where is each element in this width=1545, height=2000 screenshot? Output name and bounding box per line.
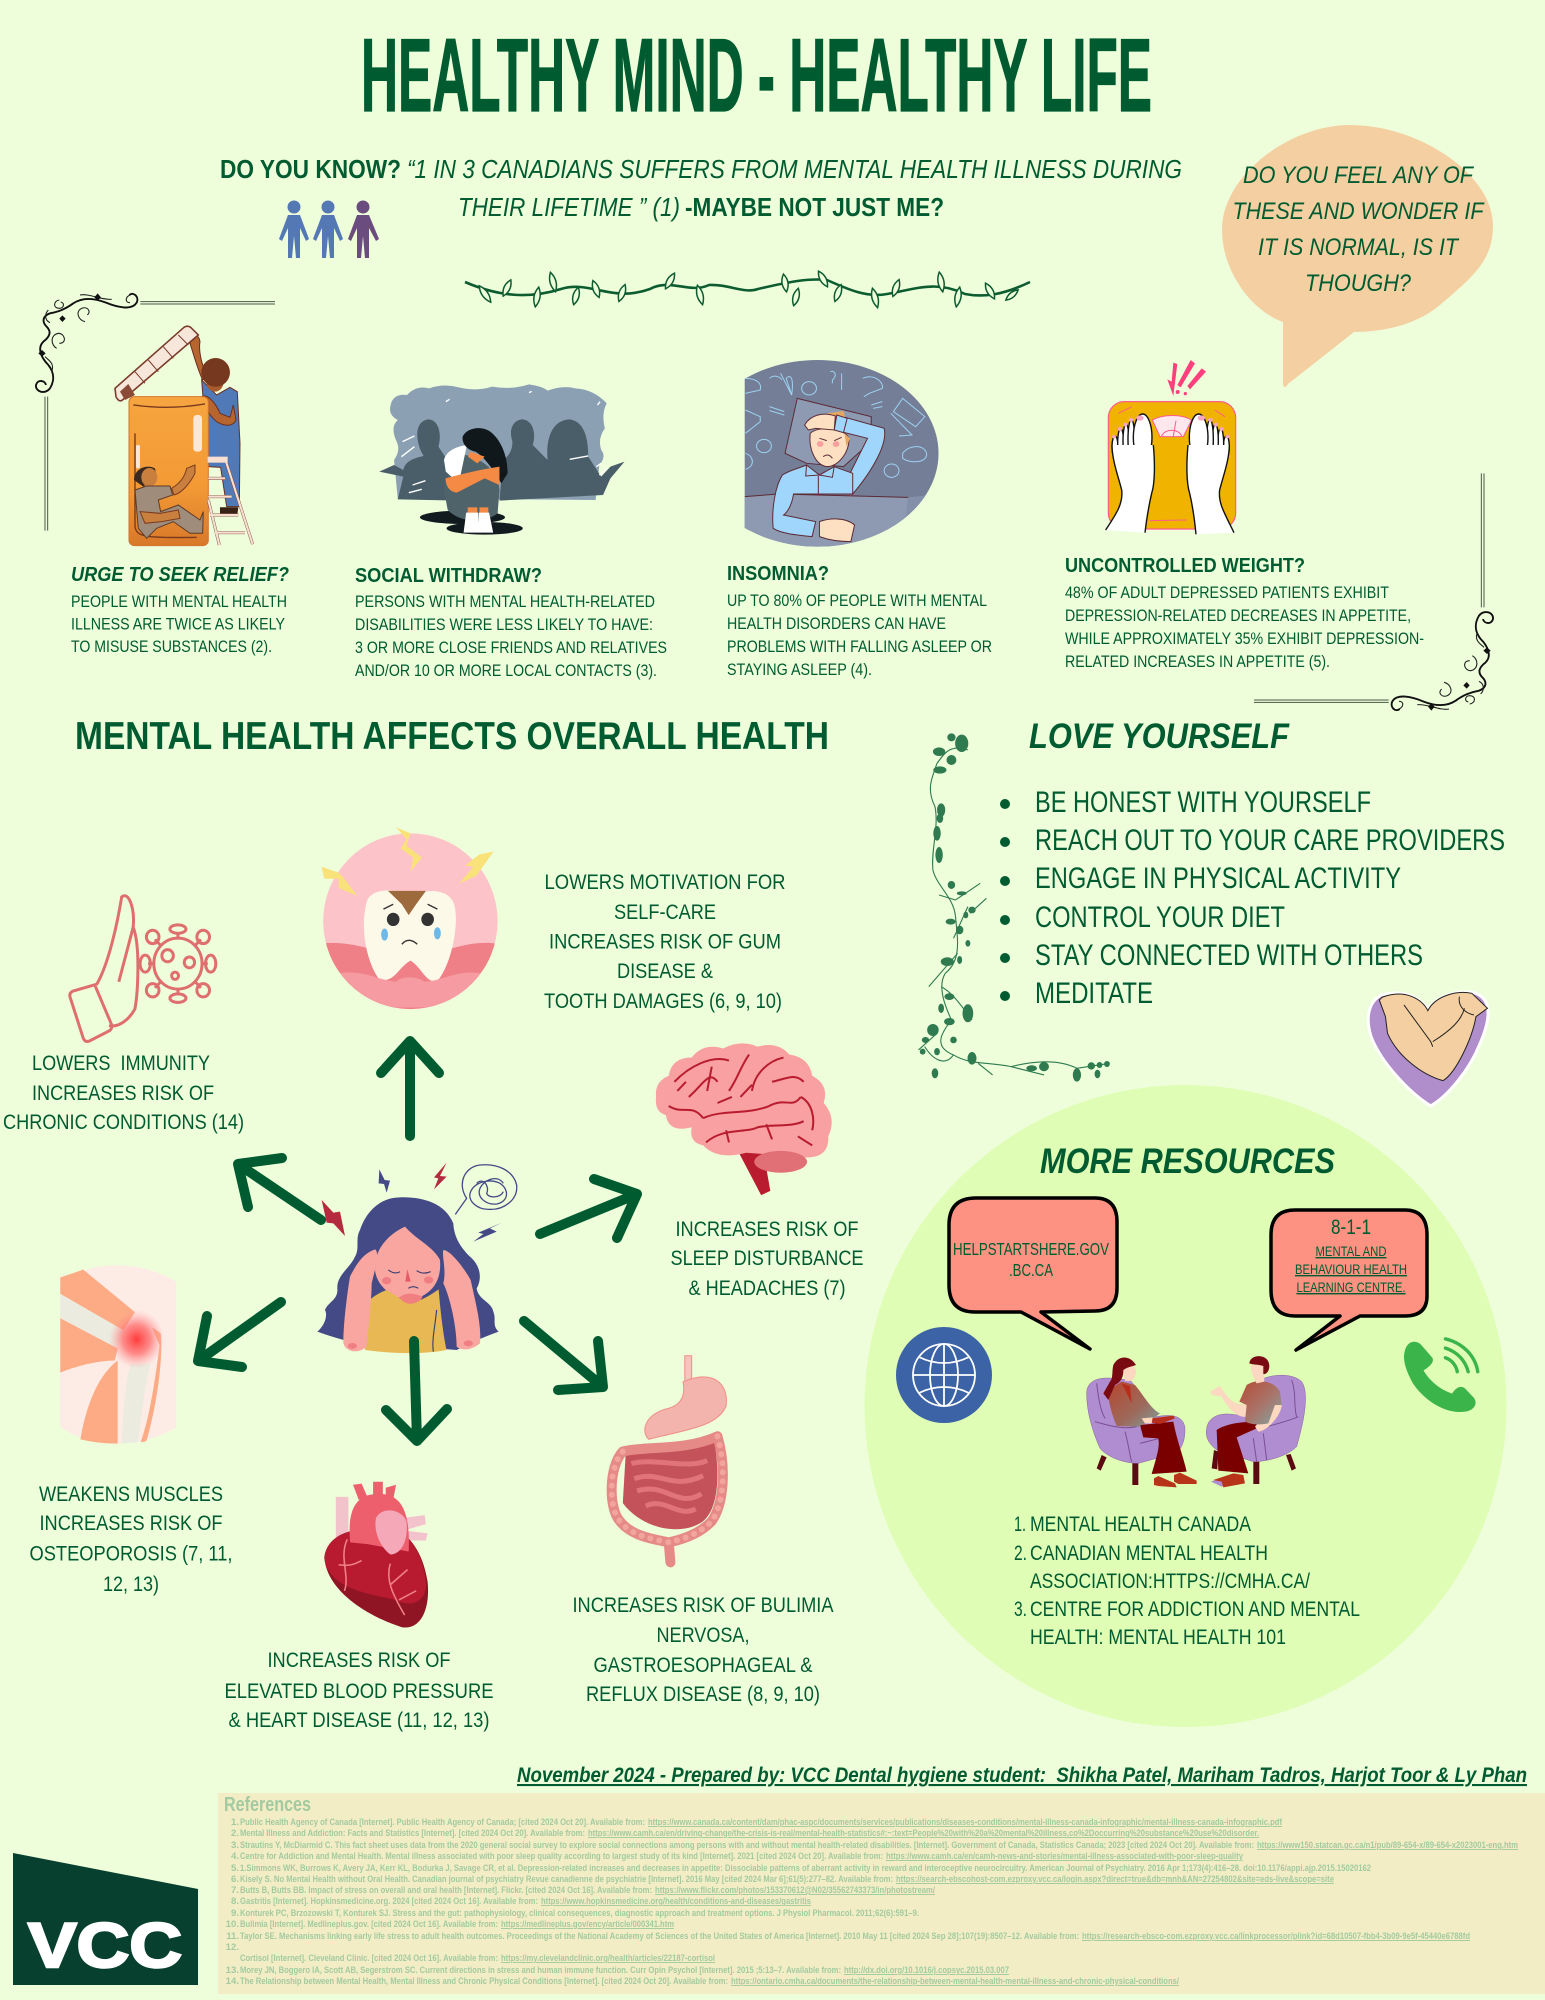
panel: references: 3.	[231, 1840, 239, 1851]
bottle cap	[115, 326, 198, 401]
numbered resource list: 1.	[1014, 1513, 1026, 1536]
text: knee: INCREASES RISK OF	[40, 1512, 222, 1535]
panel: insomnia: STAYING ASLEEP (4).	[727, 661, 872, 679]
numbered resource list: HEALTH: MENTAL HEALTH 101	[1030, 1626, 1286, 1649]
illustration: knee pain	[60, 1265, 176, 1444]
numbered resource list: MENTAL HEALTH CANADA	[1030, 1513, 1251, 1536]
panel: references: Konturek PC, Brzozowski T, Konturek SJ. Stress and the gut: pathophysiology, clinical consequences, diagnostic approach and treatment options. J Physiol Pharmacol. 2011;62(6):591–9.	[240, 1908, 919, 1919]
panel: references: https://my.clevelandclinic.org/health/articles/22187-cortisol	[501, 1953, 715, 1964]
illustration: brain	[656, 1043, 832, 1195]
speech bubble: helpstartshere: HELPSTARTSHERE.GOV	[953, 1239, 1109, 1259]
panel: references: Public Health Agency of Canada [Internet]. Public Health Agency of Canada; [cited 2024 Oct 20]. Available from:	[240, 1817, 645, 1828]
panel: references: https://ontario.cmha.ca/documents/the-relationship-between-mental-health-mental-illness-and-chronic-physical-conditions/	[731, 1976, 1179, 1987]
icon: hand stopping virus	[70, 896, 216, 1041]
speech bubble: helpstartshere: .BC.CA	[1009, 1260, 1053, 1280]
speech bubble: 8-1-1: LEARNING CENTRE.	[1296, 1279, 1406, 1295]
panel: references: 13.	[226, 1965, 239, 1976]
person in bottle	[134, 465, 203, 538]
panel: social withdraw: SOCIAL WITHDRAW?	[355, 564, 542, 587]
panel: insomnia: UP TO 80% OF PEOPLE WITH MENTAL	[727, 592, 987, 610]
text: digestive: REFLUX DISEASE (8, 9, 10)	[586, 1683, 820, 1706]
numbered resource list: 3.	[1014, 1598, 1027, 1621]
illustration: person trapped in pill bottle	[115, 326, 253, 546]
did-you-know statement: THEIR LIFETIME ” (1)	[458, 192, 680, 222]
panel: insomnia: INSOMNIA?	[727, 562, 829, 585]
panel: references: https://www.camh.ca/en/camh-news-and-stories/mental-illness-associated-with-poor-sleep-quality	[886, 1851, 1244, 1862]
numbered resource list: 2.	[1014, 1542, 1027, 1565]
panel: references: Cortisol [Internet]. Cleveland Clinic. [cited 2024 Oct 16]. Available from:	[240, 1953, 498, 1964]
panel: references: Morey JN, Boggero IA, Scott AB, Segerstrom SC. Current directions in stress and human immune function. Curr Opin Psychol [Internet]. 2015 ;5:13–7. Available from:	[240, 1965, 841, 1976]
arrow lower left	[198, 1302, 281, 1367]
panel: urge to seek relief	[71, 563, 289, 656]
text: immunity	[3, 1052, 244, 1134]
speech bubble: do you feel: DO YOU FEEL ANY OF	[1243, 162, 1475, 189]
arrow lower right	[524, 1321, 603, 1390]
icon: self-hug heart	[1368, 992, 1488, 1106]
did-you-know statement	[220, 154, 1182, 222]
panel: uncontrolled weight: UNCONTROLLED WEIGHT?	[1065, 554, 1305, 577]
speech bubble: helpstartshere	[949, 1198, 1117, 1349]
arrow upper right	[540, 1179, 637, 1238]
woman in armchair	[1087, 1357, 1197, 1487]
panel: uncontrolled weight	[1065, 554, 1424, 671]
panel: references: References	[224, 1794, 311, 1816]
text: digestive: NERVOSA,	[656, 1624, 750, 1647]
panel: references: 12.	[226, 1942, 239, 1953]
panel: references: https://www.camh.ca/en/driving-change/the-crisis-is-real/mental-health-statistics#:~:text=People%20with%20a%20mental%20illness,co%2Doccurring%20substance%20use%20disorder.	[588, 1828, 1259, 1839]
man in armchair	[1206, 1356, 1306, 1487]
speech bubble: do you feel: THOUGH?	[1305, 270, 1411, 297]
text: digestive	[572, 1594, 834, 1706]
panel: references: https://www.flickr.com/photos/153370612@N02/35562743373/in/photostream/	[655, 1885, 935, 1896]
text: heart: INCREASES RISK OF	[268, 1649, 450, 1672]
panel: references: Mental Illness and Addiction: Facts and Statistics [Internet]. [cited 2024 Oct 20]. Available from:	[240, 1828, 585, 1839]
text: tooth: INCREASES RISK OF GUM	[549, 930, 781, 954]
panel: references: Strautins Y, McDiarmid C. This fact sheet uses data from the 2020 general social survey to explore social connections among persons with and without mental health-related disabilities. [Internet]. Government of Canada, Statistics Canada; 2023 [cited 2024 Oct 20]. Available from:	[240, 1840, 1254, 1851]
text: tooth	[544, 871, 786, 1013]
bullet list: love yourself: STAY CONNECTED WITH OTHERS	[1035, 939, 1423, 972]
text: knee: 12, 13)	[103, 1573, 159, 1596]
arrows from centre to body systems	[198, 1041, 637, 1441]
panel: urge to seek relief: TO MISUSE SUBSTANCES (2).	[71, 638, 272, 656]
arrow down	[386, 1341, 447, 1441]
panel: references: 11.	[226, 1931, 239, 1942]
VCC logo: VCC	[28, 1911, 182, 1981]
panel: urge to seek relief: URGE TO SEEK RELIEF?	[71, 563, 289, 586]
panel: references: https://search-ebscohost-com.ezproxy.vcc.ca/login.aspx?direct=true&db=mnh&AN=27254802&site=eds-live&scope=site	[896, 1874, 1334, 1885]
panel: references: The Relationship between Mental Health, Mental Illness and Chronic Physical Conditions [Internet]. [cited 2024 Oct 20]. Available from:	[240, 1976, 728, 1987]
text: tooth: SELF-CARE	[614, 901, 716, 924]
text: brain: SLEEP DISTURBANCE	[670, 1247, 864, 1270]
standing person	[190, 335, 240, 515]
panel: more resources circle	[864, 1085, 1506, 1727]
illustration: girl with headache	[317, 1163, 517, 1353]
panel: references: Bulimia [Internet]. Medlineplus.gov. [cited 2024 Oct 16]. Available from:	[240, 1919, 498, 1930]
text: tooth: DISEASE &	[617, 960, 713, 983]
speech bubble: do you feel: THESE AND WONDER IF	[1232, 198, 1485, 225]
text: immunity: CHRONIC CONDITIONS (14)	[3, 1111, 244, 1134]
corner ornament top left	[36, 293, 275, 531]
text: brain: & HEADACHES (7)	[688, 1277, 846, 1300]
did-you-know statement: DO YOU KNOW?	[220, 154, 401, 184]
panel: social withdraw: AND/OR 10 OR MORE LOCAL CONTACTS (3).	[355, 662, 657, 680]
heading: love yourself: LOVE YOURSELF	[1029, 717, 1290, 756]
heading: more resources: MORE RESOURCES	[1040, 1142, 1335, 1181]
bullet list: love yourself: BE HONEST WITH YOURSELF	[1035, 786, 1371, 819]
illustration: man with insomnia	[744, 360, 938, 547]
bullet list: love yourself	[1000, 786, 1505, 1010]
text: heart: ELEVATED BLOOD PRESSURE	[224, 1680, 494, 1703]
panel: social withdraw	[355, 564, 667, 680]
panel: references: 2.	[231, 1828, 239, 1839]
panel: urge to seek relief: ILLNESS ARE TWICE AS LIKELY	[71, 616, 285, 634]
panel: references: 1.	[231, 1817, 239, 1828]
text: brain: INCREASES RISK OF	[676, 1218, 858, 1241]
climbing vine	[919, 733, 1110, 1082]
numbered resource list: CENTRE FOR ADDICTION AND MENTAL	[1030, 1598, 1360, 1621]
panel: references: 8.	[231, 1896, 239, 1907]
panel: references: https://www.canada.ca/content/dam/phac-aspc/documents/services/publications/diseases-conditions/mental-illness-canada-infographic/mental-illness-canada-infographic.pdf	[648, 1817, 1283, 1828]
illustration: social withdrawal	[379, 384, 624, 535]
panel: references: Taylor SE. Mechanisms linking early life stress to adult health outcomes. Proceedings of the National Academy of Sciences of the United States of America [Internet]. 2010 May 11 [cited 2024 Sep 28];107(19):8507–12. Available from:	[240, 1931, 1079, 1942]
panel: references: https://medlineplus.gov/ency/article/000341.htm	[501, 1919, 674, 1930]
illustration: digestive tract	[612, 1356, 726, 1562]
text: knee: OSTEOPOROSIS (7, 11,	[30, 1542, 232, 1566]
panel: references: 4.	[231, 1851, 239, 1862]
right foot	[1187, 414, 1234, 534]
VCC logo	[13, 1853, 198, 1985]
panel: references: Kisely S. No Mental Health without Oral Health. Canadian journal of psychiatry Revue canadienne de psychiatrie [Internet]. 2016 May [cited 2024 Mar 6];61(5):277–82. Available from:	[240, 1874, 893, 1885]
panel: references: 10.	[226, 1919, 239, 1930]
icon: globe	[896, 1327, 992, 1423]
did-you-know statement: “1 IN 3 CANADIANS SUFFERS FROM MENTAL HEALTH ILLNESS DURING	[407, 154, 1182, 184]
panel: social withdraw: PERSONS WITH MENTAL HEALTH-RELATED	[355, 593, 655, 611]
illustration: counselling session	[1087, 1356, 1306, 1487]
bottle	[129, 397, 208, 546]
panel: insomnia: PROBLEMS WITH FALLING ASLEEP OR	[727, 638, 992, 656]
panel: references: Butts B, Butts BB. Impact of stress on overall and oral health [Internet]. Flickr. [cited 2024 Oct 16]. Available from:	[240, 1885, 652, 1896]
text: brain	[670, 1218, 864, 1300]
panel: uncontrolled weight: WHILE APPROXIMATELY 35% EXHIBIT DEPRESSION-	[1065, 630, 1424, 648]
panel: references: Centre for Addiction and Mental Health. Mental illness associated with poor sleep quality according to largest study of its kind [Internet]. 2021 [cited 2024 Oct 20]. Available from:	[240, 1851, 883, 1862]
panel: references: http://dx.doi.org/10.1016/j.copsyc.2015.03.007	[844, 1965, 1009, 1976]
illustration: heart	[324, 1482, 428, 1628]
panel: references: 14.	[226, 1976, 239, 1987]
illustration: tooth with pain	[322, 827, 498, 1010]
panel: references: Gastritis [Internet]. Hopkinsmedicine.org. 2024 [cited 2024 Oct 16]. Available from:	[240, 1896, 538, 1907]
text: tooth: LOWERS MOTIVATION FOR	[544, 871, 786, 894]
text: tooth: TOOTH DAMAGES (6, 9, 10)	[544, 990, 782, 1013]
text: digestive: GASTROESOPHAGEAL &	[594, 1654, 812, 1677]
panel: references: 7.	[231, 1885, 239, 1896]
panel: social withdraw: DISABILITIES WERE LESS LIKELY TO HAVE:	[355, 616, 653, 634]
icon: three people	[279, 200, 379, 258]
numbered resource list: CANADIAN MENTAL HEALTH	[1030, 1542, 1268, 1565]
vine divider	[465, 270, 1030, 308]
panel: references: 9.	[231, 1908, 239, 1919]
numbered resource list: ASSOCIATION:HTTPS://CMHA.CA/	[1030, 1570, 1310, 1593]
panel: references: 5.	[231, 1863, 239, 1874]
left foot	[1106, 414, 1154, 533]
numbered resource list	[1014, 1513, 1360, 1649]
text: digestive: INCREASES RISK OF BULIMIA	[572, 1594, 834, 1617]
panel: references: 6.	[231, 1874, 239, 1885]
speech bubble: 8-1-1	[1271, 1210, 1427, 1350]
heading: mental health affects overall health: MENTAL HEALTH AFFECTS OVERALL HEALTH	[75, 715, 829, 758]
panel: uncontrolled weight: 48% OF ADULT DEPRESSED PATIENTS EXHIBIT	[1065, 584, 1389, 602]
text: knee	[30, 1483, 232, 1596]
speech bubble: 8-1-1: MENTAL AND	[1316, 1243, 1386, 1259]
did-you-know statement: -MAYBE NOT JUST ME?	[685, 192, 944, 222]
corner ornament bottom right	[1254, 473, 1493, 711]
text: heart: & HEART DISEASE (11, 12, 13)	[228, 1709, 490, 1732]
bullet list: love yourself: CONTROL YOUR DIET	[1035, 901, 1285, 934]
panel: references: https://www.hopkinsmedicine.org/health/conditions-and-diseases/gastritis	[541, 1896, 811, 1907]
text: knee: WEAKENS MUSCLES	[39, 1483, 223, 1506]
arrow upper left	[238, 1158, 321, 1220]
panel: references	[218, 1793, 1545, 1994]
text: heart	[224, 1649, 494, 1732]
speech bubble: do you feel	[1222, 125, 1493, 387]
speech bubble: do you feel: IT IS NORMAL, IS IT	[1258, 234, 1460, 261]
crouching figure	[420, 428, 523, 535]
panel: uncontrolled weight: RELATED INCREASES IN APPETITE (5).	[1065, 653, 1330, 671]
arrow up	[381, 1041, 439, 1136]
text: immunity: LOWERS IMMUNITY	[32, 1052, 210, 1075]
bullet list: love yourself: ENGAGE IN PHYSICAL ACTIVITY	[1035, 862, 1401, 895]
panel: insomnia	[727, 562, 992, 679]
speech bubble: 8-1-1: 8-1-1	[1331, 1216, 1371, 1239]
speech bubble: 8-1-1: BEHAVIOUR HEALTH	[1295, 1261, 1407, 1277]
icon: phone	[1404, 1339, 1478, 1412]
ladder	[208, 458, 253, 545]
text: immunity: INCREASES RISK OF	[32, 1082, 214, 1105]
illustration: feet on a scale	[1106, 360, 1236, 534]
panel: insomnia: HEALTH DISORDERS CAN HAVE	[727, 615, 946, 633]
panel: social withdraw: 3 OR MORE CLOSE FRIENDS AND RELATIVES	[355, 639, 667, 657]
bullet list: love yourself: MEDITATE	[1035, 977, 1153, 1010]
panel: urge to seek relief: PEOPLE WITH MENTAL HEALTH	[71, 593, 287, 611]
panel: uncontrolled weight: DEPRESSION-RELATED DECREASES IN APPETITE,	[1065, 607, 1411, 625]
